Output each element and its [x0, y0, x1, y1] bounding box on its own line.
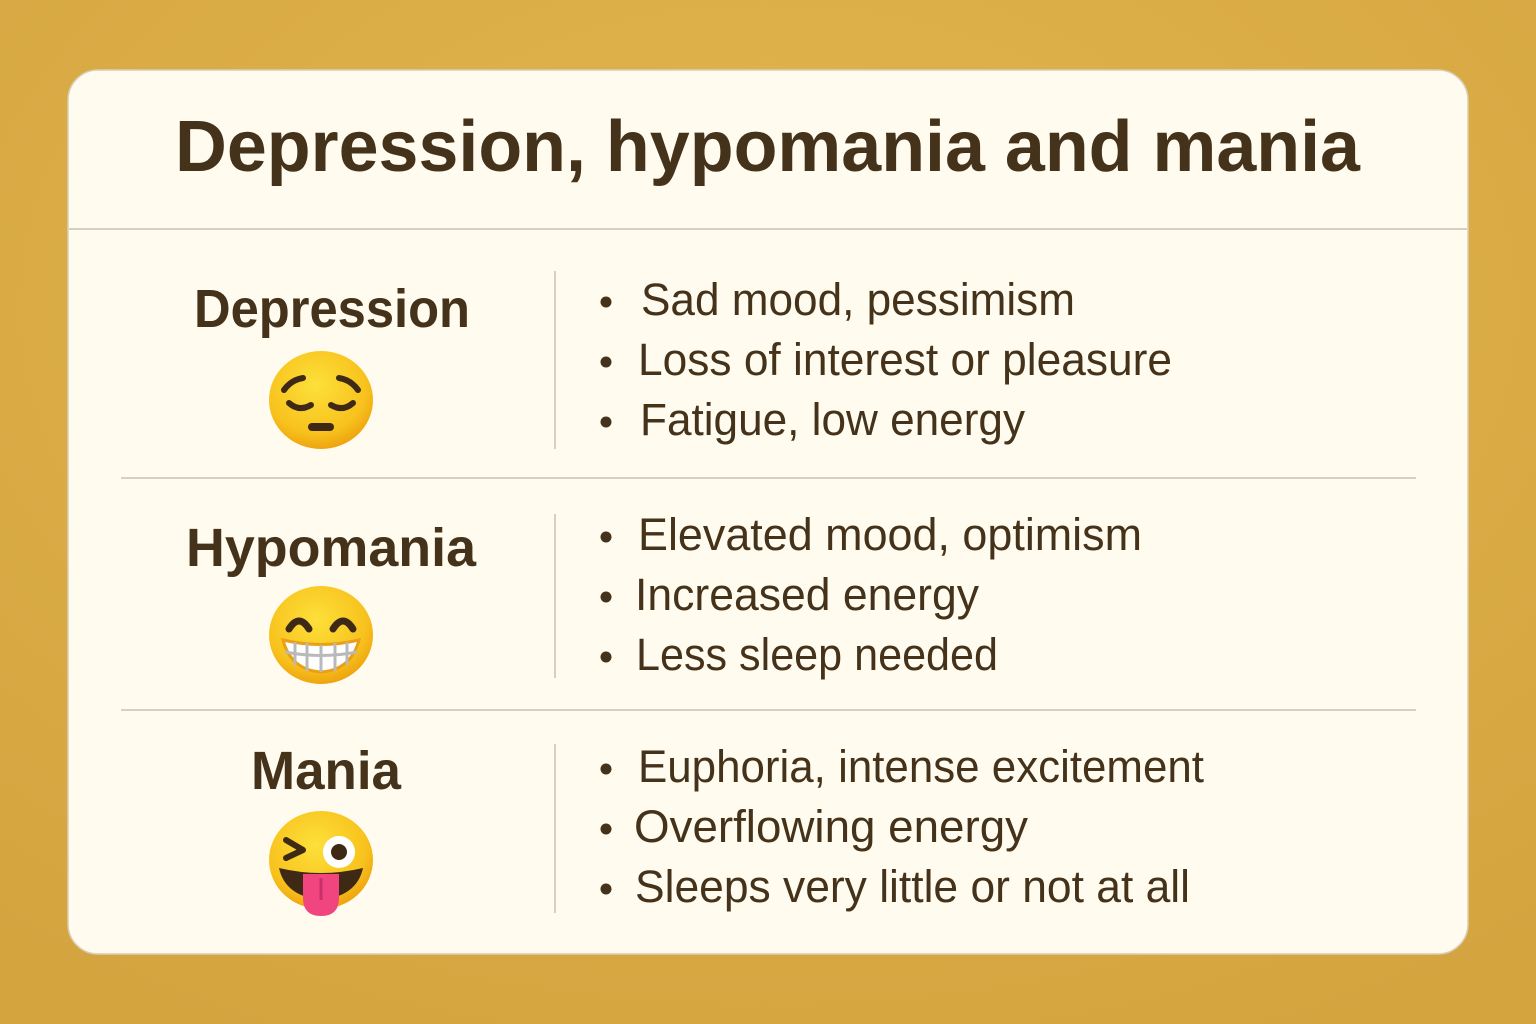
bullets: mania: Overflowing energy: [634, 801, 1029, 852]
bullets: depression: Fatigue, low energy: [640, 394, 1025, 445]
bullets: depression: Sad mood, pessimism: [641, 274, 1075, 325]
row: hypomania: [186, 509, 1142, 684]
bullets: depression: Loss of interest or pleasure: [638, 334, 1172, 385]
bullets: mania: Euphoria, intense excitement: [638, 741, 1204, 792]
label: Mania: Mania: [251, 741, 402, 801]
bullets: hypomania: Less sleep needed: [636, 629, 998, 680]
row: mania: [251, 741, 1204, 916]
bullets: hypomania: [600, 509, 1142, 680]
bullets: depression: [600, 274, 1172, 445]
icon: winking face with tongue: [269, 811, 373, 916]
bullets: hypomania: Elevated mood, optimism: [638, 509, 1142, 560]
label: Hypomania: Hypomania: [186, 518, 477, 578]
title: Depression, hypomania and mania: [175, 107, 1361, 187]
label: Depression: Depression: [194, 279, 470, 339]
icon: pensive face: [269, 351, 373, 449]
icon: grinning face: [269, 586, 373, 684]
row: depression: [194, 274, 1172, 449]
bullets: mania: [600, 741, 1204, 912]
bullets: mania: Sleeps very little or not at all: [635, 861, 1190, 912]
bullets: hypomania: Increased energy: [635, 569, 979, 620]
